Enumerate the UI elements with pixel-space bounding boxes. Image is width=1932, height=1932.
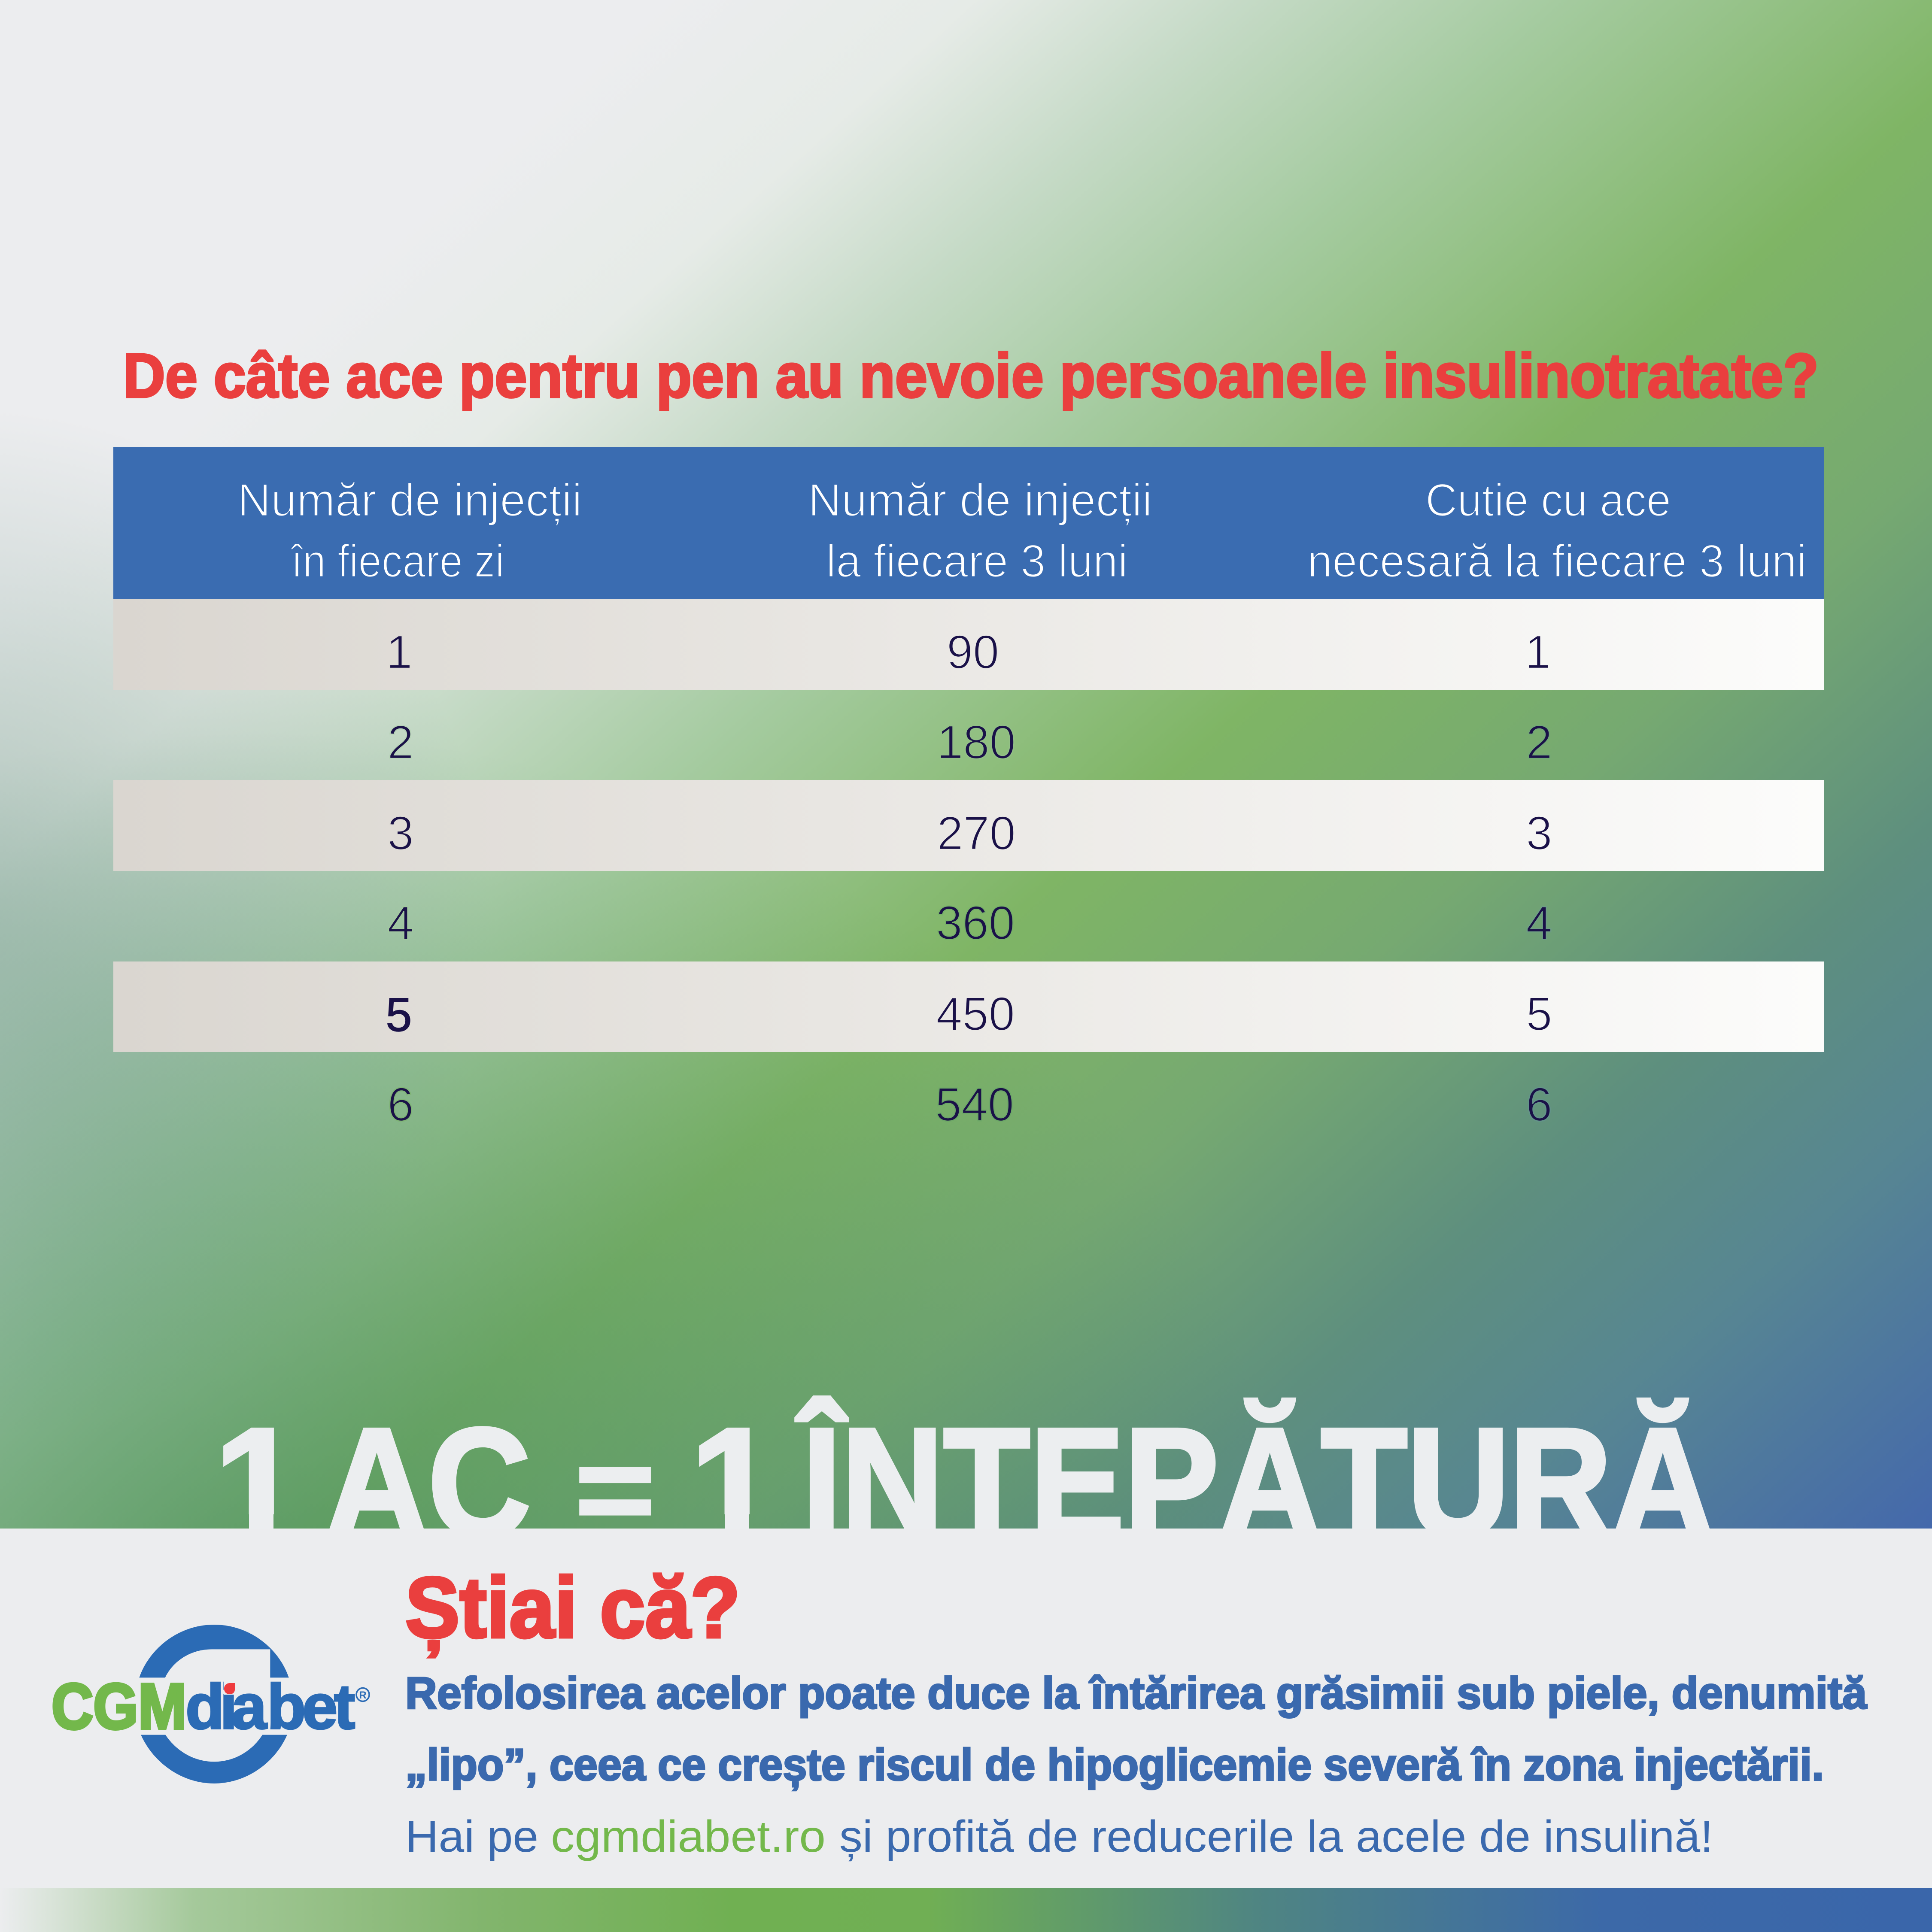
column header: boxes per 3 months bbox=[1307, 474, 1807, 587]
row 6: 6 bbox=[387, 1078, 414, 1131]
column header: boxes per 3 months: Cutie cu ace bbox=[1425, 474, 1671, 526]
row 5: 450 bbox=[936, 988, 1015, 1040]
row 5: 5 bbox=[386, 989, 412, 1041]
column header: injections per 3 months bbox=[808, 474, 1152, 587]
row 3: 270 bbox=[937, 807, 1016, 860]
row 1: 90 bbox=[947, 626, 999, 679]
title: De câte ace pentru pen au nevoie persoanele insulinotratate? bbox=[123, 341, 1819, 410]
row 4: 360 bbox=[936, 897, 1015, 949]
row 3: 3 bbox=[387, 807, 414, 860]
logo ring bbox=[139, 1625, 289, 1783]
row 2: 180 bbox=[937, 716, 1016, 769]
column header: injections per day bbox=[237, 474, 582, 587]
registered mark: R bbox=[359, 1689, 367, 1701]
column header: boxes per 3 months: necesară la fiecare 3 luni bbox=[1307, 535, 1807, 587]
row 6 bbox=[387, 1078, 1552, 1131]
row 6: 540 bbox=[935, 1078, 1014, 1131]
column header: injections per day: în fiecare zi bbox=[290, 535, 504, 587]
callout heading: Știai că? bbox=[405, 1560, 740, 1657]
bottom panel bbox=[0, 1529, 1932, 1888]
callout text line 1: Refolosirea acelor poate duce la întărirea grăsimii sub piele, denumită bbox=[405, 1668, 1867, 1718]
row 6: 6 bbox=[1526, 1078, 1552, 1131]
row 4 bbox=[387, 897, 1552, 949]
i dot cover bbox=[224, 1679, 235, 1695]
row 5: 5 bbox=[1526, 988, 1552, 1040]
big slogan: 1 bbox=[215, 1396, 301, 1569]
row 1: 1 bbox=[1525, 626, 1551, 679]
bottom gradient strip bbox=[0, 1888, 1932, 1932]
big slogan: 1 bbox=[690, 1396, 776, 1569]
row 5 bbox=[113, 961, 1824, 1052]
logo text: CGM: CGM bbox=[52, 1670, 186, 1742]
big slogan: AC bbox=[325, 1396, 531, 1569]
big slogan: ÎNTEPĂTURĂ bbox=[796, 1396, 1714, 1569]
table bbox=[113, 447, 1824, 1131]
row 1: 1 bbox=[386, 626, 413, 679]
column header: injections per 3 months: Număr de injecții bbox=[808, 474, 1152, 526]
call to action bbox=[405, 1812, 1713, 1862]
callout text line 2: „lipo”, ceea ce crește riscul de hipoglicemie severă în zona injectării. bbox=[405, 1740, 1824, 1790]
call to action: și profită de reducerile la acele de insulină! bbox=[839, 1812, 1713, 1862]
row 1 bbox=[113, 599, 1824, 690]
big slogan: = bbox=[575, 1422, 655, 1557]
big slogan bbox=[215, 1396, 1714, 1569]
logo text: diabet: diabet bbox=[185, 1671, 355, 1742]
row 4: 4 bbox=[387, 897, 414, 949]
icon: red drop over i bbox=[224, 1683, 235, 1694]
call to action: cgmdiabet.ro bbox=[551, 1812, 826, 1862]
row 2: 2 bbox=[387, 716, 414, 769]
row 2: 2 bbox=[1526, 716, 1552, 769]
row 3 bbox=[113, 780, 1824, 871]
column header: injections per day: Număr de injecții bbox=[237, 474, 582, 526]
row 4: 4 bbox=[1526, 897, 1552, 949]
registered mark bbox=[356, 1688, 369, 1701]
call to action: Hai pe bbox=[405, 1812, 538, 1862]
logo: CGMdiabet bbox=[52, 1625, 369, 1783]
row 3: 3 bbox=[1526, 807, 1552, 860]
column header: injections per 3 months: la fiecare 3 luni bbox=[826, 535, 1128, 587]
row 2 bbox=[387, 716, 1552, 769]
table header bbox=[113, 447, 1824, 599]
